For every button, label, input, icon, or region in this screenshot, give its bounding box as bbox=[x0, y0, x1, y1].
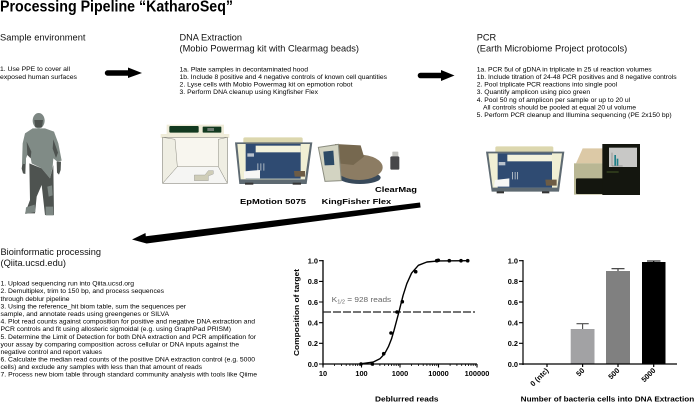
text block: bioinformatic steps: 3. Using the reference_hit biom table, sum the sequences per bbox=[0, 303, 187, 310]
x axis labels bbox=[319, 369, 489, 378]
y axis labels: 0.6 bbox=[508, 298, 518, 307]
icon: ClearMag bottle bbox=[390, 152, 399, 170]
label: EpMotion 5075: EpMotion 5075 bbox=[240, 197, 306, 206]
y axis labels bbox=[308, 256, 319, 369]
text block: bioinformatic steps: PCR controls and fit using allosteric sigmoidal (e.g. using GraphPad PRISM) bbox=[0, 326, 231, 333]
y axis labels: 0.4 bbox=[508, 318, 519, 328]
heading: DNA extraction: DNA Extraction bbox=[180, 32, 242, 44]
text block: bioinformatic steps: your assay by comparing composition across cellular or DNA inputs against the bbox=[0, 341, 239, 348]
text block: extraction steps: 3. Perform DNA cleanup using Kingfisher Flex bbox=[180, 89, 319, 96]
text block: PCR steps: All controls should be pooled at equal 20 ul volume bbox=[483, 104, 636, 112]
half-saturation annotation: 1/2 bbox=[337, 300, 345, 306]
text block: extraction steps: 1b. Include 8 positive and 4 negative controls of known cell quantities bbox=[180, 74, 388, 81]
heading: DNA extraction: (Mobio Powermag kit with Clearmag beads) bbox=[180, 44, 359, 54]
heading: PCR bbox=[477, 32, 627, 54]
heading: DNA extraction bbox=[180, 32, 359, 54]
icon: decontaminated hood bbox=[161, 125, 229, 183]
arrow: DNA extraction to PCR bbox=[418, 70, 454, 81]
axes and ticks bbox=[319, 260, 477, 368]
y axis labels: 0.8 bbox=[308, 277, 318, 286]
y axis labels: 0.4 bbox=[308, 318, 319, 328]
y axis labels: 0.8 bbox=[508, 277, 518, 286]
heading: PCR: (Earth Microbiome Project protocols) bbox=[477, 44, 627, 54]
heading: bioinformatic processing bbox=[0, 247, 101, 269]
text block: PCR steps: 5. Perform PCR cleanup and Illumina sequencing (PE 2x150 bp) bbox=[477, 112, 672, 119]
text block: bioinformatic steps: 1. Upload sequencing run into Qiita.ucsd.org bbox=[0, 281, 134, 288]
x axis labels bbox=[528, 366, 657, 388]
y axis labels: 0.0 bbox=[508, 360, 518, 369]
heading: sample environment: Sample environment bbox=[0, 32, 86, 44]
x axis labels: 100 bbox=[355, 369, 368, 378]
text block: PCR steps bbox=[477, 66, 677, 119]
heading: bioinformatic processing: Bioinformatic processing bbox=[0, 247, 101, 258]
half-saturation annotation: = 928 reads bbox=[345, 295, 391, 304]
y axis labels: 1.0 bbox=[308, 256, 318, 266]
text block: sample steps: 1. Use PPE to cover all bbox=[0, 66, 70, 73]
text block: PCR steps: 1a. PCR 5ul of gDNA in triplicate in 25 ul reaction volumes bbox=[477, 66, 652, 73]
text block: bioinformatic steps: cells) and exclude any samples with less than that amount of reads bbox=[0, 364, 203, 371]
label: KingFisher Flex: KingFisher Flex bbox=[322, 197, 391, 206]
half-saturation annotation: K bbox=[332, 295, 337, 304]
text block: extraction steps bbox=[180, 66, 388, 96]
axes and ticks bbox=[519, 260, 677, 367]
chart: bar chart of bacteria cells bbox=[508, 256, 695, 403]
panel: sample environment bbox=[0, 32, 86, 215]
text block: sample steps: exposed human surfaces bbox=[0, 74, 78, 81]
arrow: PCR to bioinformatic processing bbox=[132, 202, 421, 244]
x axis labels: 10000 bbox=[428, 369, 449, 378]
data points bbox=[359, 258, 470, 366]
chart: composition of target vs deblurred reads bbox=[292, 256, 489, 403]
panel: PCR bbox=[477, 32, 677, 195]
text block: bioinformatic steps: sample, and annotate reads using greengenes or SILVA bbox=[0, 311, 169, 318]
x axis labels: 0 (ntc) bbox=[528, 366, 551, 388]
dashed threshold line bbox=[323, 311, 475, 313]
text block: extraction steps: 2. Lyse cells with Mobio Powermag kit on epmotion robot bbox=[180, 82, 353, 88]
panel: DNA extraction bbox=[161, 32, 417, 206]
icon: person in protective suit bbox=[22, 113, 62, 215]
icon: sequencer instrument bbox=[574, 144, 640, 195]
x axis labels: 50 bbox=[574, 366, 586, 378]
heading: bioinformatic processing: (Qiita.ucsd.edu) bbox=[0, 258, 66, 269]
text block: bioinformatic steps: 6. Calculate the median read counts of the positive DNA extraction control (e.g. 5000 bbox=[0, 356, 255, 363]
y axis labels: 0.6 bbox=[308, 298, 318, 307]
text block: bioinformatic steps: 4. Plot read counts against composition for positive and negative DNA extraction and bbox=[0, 319, 255, 326]
x axis labels: 10 bbox=[319, 369, 327, 378]
panel: bioinformatic processing bbox=[0, 247, 257, 379]
sigmoid fit curve bbox=[362, 261, 469, 364]
y axis labels: 0.2 bbox=[508, 339, 518, 348]
text block: bioinformatic steps: negative control and report values bbox=[0, 349, 103, 356]
x axis labels: 500 bbox=[606, 366, 621, 381]
text block: bioinformatic steps bbox=[0, 281, 257, 379]
x axis labels: 5000 bbox=[639, 366, 657, 384]
y axis labels bbox=[508, 256, 519, 369]
y axis labels: 1.0 bbox=[508, 256, 518, 266]
icon: PCR liquid handling robot bbox=[486, 146, 564, 193]
text block: PCR steps: 1b. Include titration of 24-48 PCR positives and 8 negative controls bbox=[477, 74, 677, 81]
text block: PCR steps: 4. Pool 50 ng of amplicon per sample or up to 20 ul bbox=[477, 97, 631, 104]
text block: sample steps bbox=[0, 66, 78, 81]
heading: PCR: PCR bbox=[477, 32, 496, 44]
text block: bioinformatic steps: 2. Demultiplex, trim to 150 bp, and process sequences bbox=[0, 288, 165, 295]
text block: PCR steps: 3. Quantify amplicon using pico green bbox=[477, 89, 590, 96]
axis title: composition of target: Composition of target bbox=[292, 268, 301, 356]
x axis labels: 1000 bbox=[392, 369, 408, 378]
y axis labels: 0.0 bbox=[308, 360, 318, 369]
icon: KingFisher Flex instrument bbox=[318, 144, 383, 184]
text block: bioinformatic steps: 7. Process new biom table through standard community analysis with tools like Qiime bbox=[0, 372, 257, 379]
text block: PCR steps: 2. Pool triplicate PCR reactions into single pool bbox=[477, 82, 618, 88]
y axis labels: 0.2 bbox=[308, 339, 318, 348]
text block: bioinformatic steps: 5. Determine the Limit of Detection for both DNA extraction and PCR amplification for bbox=[0, 334, 257, 341]
icon: EpMotion 5075 robot bbox=[235, 137, 312, 185]
x axis labels: 100000 bbox=[465, 369, 489, 378]
arrow: sample to DNA extraction bbox=[105, 68, 142, 78]
label: ClearMag: ClearMag bbox=[375, 185, 417, 194]
bars with error bars bbox=[571, 261, 666, 364]
text block: extraction steps: 1a. Plate samples in decontaminated hood bbox=[180, 66, 308, 73]
text block: bioinformatic steps: through deblur pipeline bbox=[0, 296, 70, 303]
